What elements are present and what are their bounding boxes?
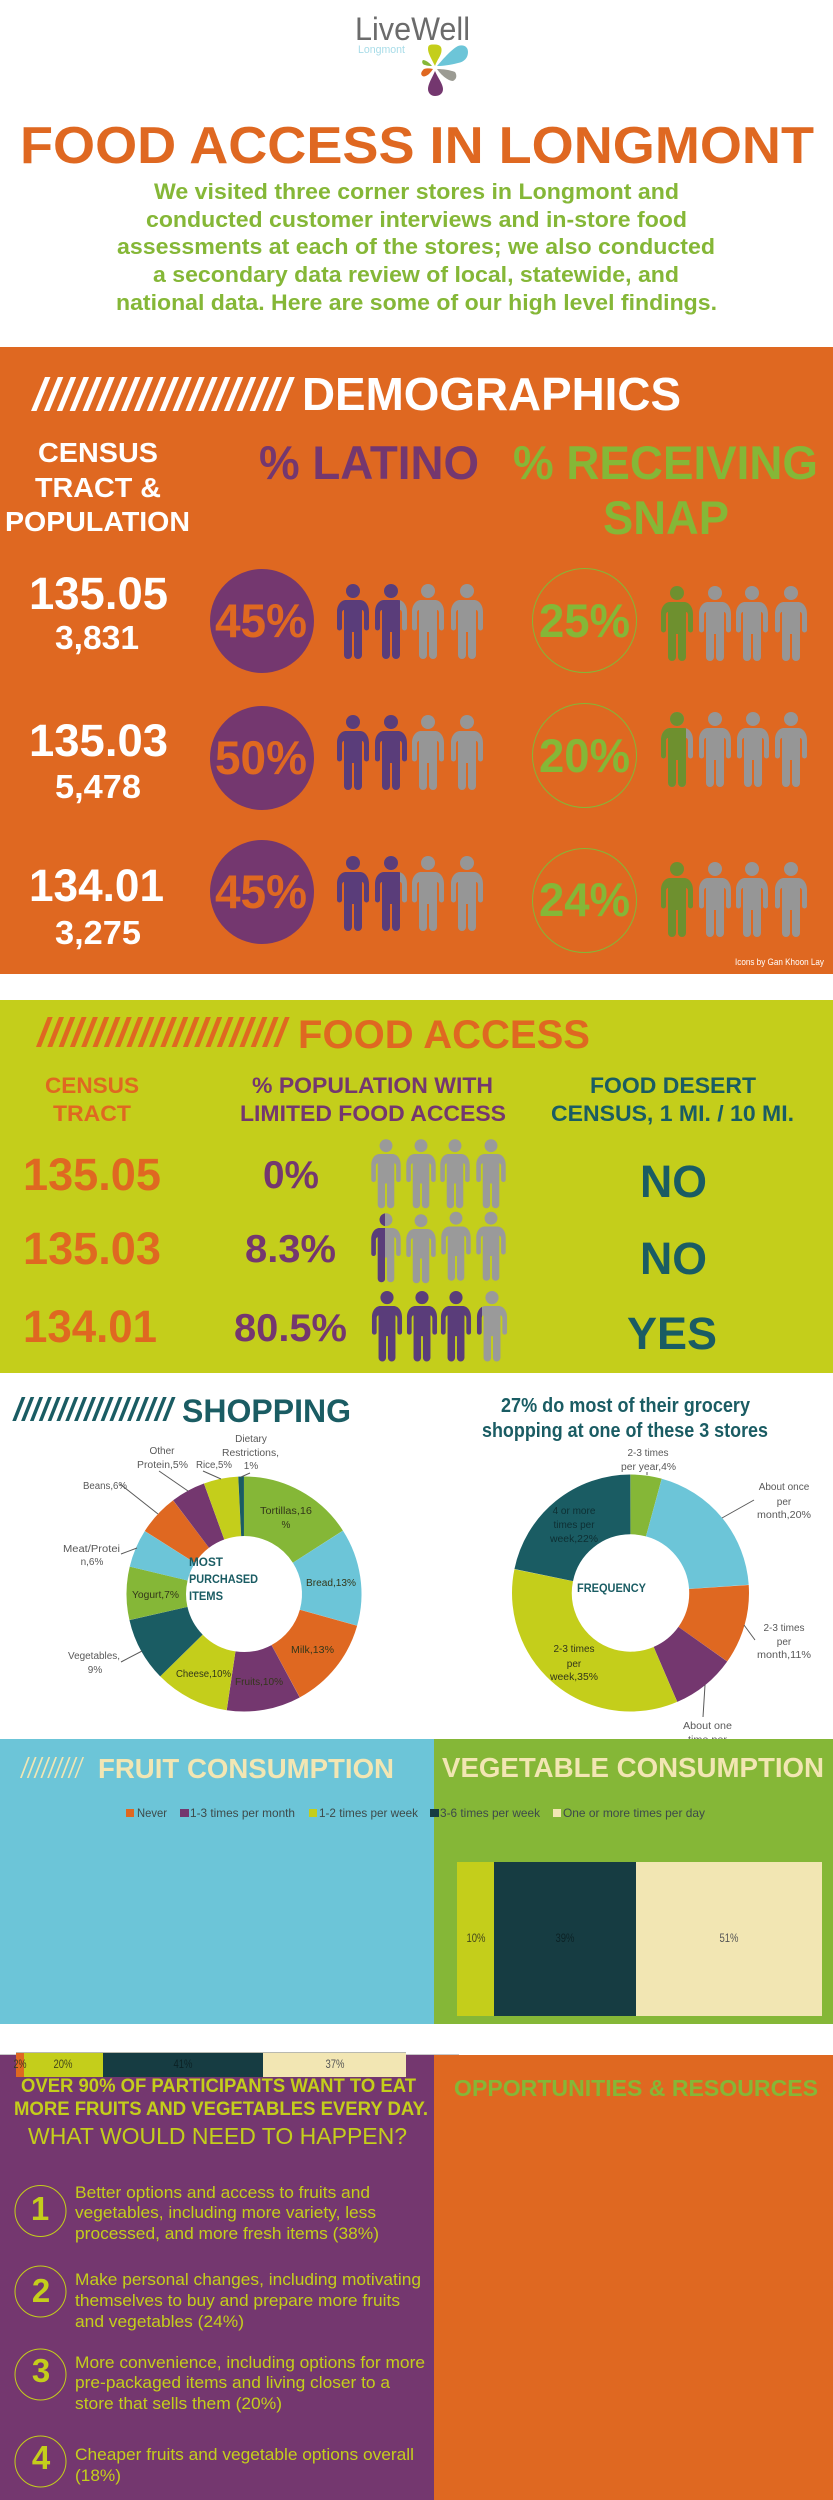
row: 134.01 food access: 134.01 bbox=[23, 1301, 157, 1352]
donut chart: most purchased items: % bbox=[282, 1520, 291, 1531]
subheading: grocery shopping share: shopping at one of these 3 stores bbox=[482, 1420, 768, 1442]
donut chart: shopping frequency: per year,4% bbox=[621, 1462, 676, 1473]
stacked bar: fruit consumption: 2% bbox=[14, 2057, 27, 2071]
legend: consumption frequency bbox=[126, 1806, 705, 1820]
donut chart: shopping frequency: FREQUENCY bbox=[577, 1581, 646, 1595]
item 4: cheaper options: (18%) bbox=[75, 2466, 121, 2485]
donut chart: most purchased items: Meat/Protei bbox=[63, 1544, 120, 1555]
item 2: personal changes: 2 bbox=[32, 2272, 50, 2309]
column heading: food desert: FOOD DESERT bbox=[590, 1073, 757, 1098]
donut chart: shopping frequency: time per bbox=[688, 1735, 728, 1746]
subheading: what would need to happen: WHAT WOULD NEED TO HAPPEN? bbox=[28, 2123, 407, 2149]
intro text: national data. Here are some of our high level findings. bbox=[116, 290, 717, 315]
row: 135.03 food access: 8.3% bbox=[245, 1228, 336, 1271]
intro text: assessments at each of the stores; we also conducted bbox=[117, 234, 715, 259]
donut chart: most purchased items: n,6% bbox=[81, 1557, 104, 1568]
food access slash decoration bbox=[42, 1017, 284, 1047]
item 3: more convenience: store that sells them (20%) bbox=[75, 2394, 282, 2413]
row: 135.03 food access bbox=[23, 1212, 707, 1284]
donut chart: most purchased items: Protein,5% bbox=[137, 1460, 188, 1471]
donut chart: shopping frequency: About once bbox=[759, 1482, 810, 1493]
legend: consumption frequency: 3-6 times per week bbox=[440, 1806, 541, 1820]
donut chart: shopping frequency: 4 or more bbox=[553, 1506, 596, 1517]
subheading: grocery shopping share bbox=[482, 1395, 768, 1442]
row: 134.01 food access: YES bbox=[627, 1308, 717, 1359]
demographics slash decoration bbox=[38, 377, 288, 411]
legend: consumption frequency: Never bbox=[137, 1806, 167, 1820]
donut chart: most purchased items: Cheese,10% bbox=[176, 1669, 231, 1680]
intro text: We visited three corner stores in Longmont and bbox=[154, 179, 679, 204]
item 1: better options: vegetables, including more variety, less bbox=[75, 2203, 376, 2222]
donut chart: most purchased items: Fruits,10% bbox=[235, 1677, 283, 1688]
logo: LiveWell Longmont bbox=[355, 11, 470, 96]
row: tract 135.05: 135.05 bbox=[29, 568, 168, 619]
intro text: a secondary data review of local, statewide, and bbox=[153, 262, 679, 287]
donut chart: most purchased items: Bread,13% bbox=[306, 1578, 356, 1589]
donut chart: most purchased items: MOST bbox=[189, 1555, 224, 1569]
intro text bbox=[116, 179, 717, 315]
row: tract 135.03: 135.03 bbox=[29, 715, 168, 766]
donut chart: shopping frequency: About one bbox=[683, 1721, 732, 1732]
column heading: census tract and population: TRACT & bbox=[35, 472, 161, 503]
row: tract 134.01: 24% bbox=[539, 873, 630, 926]
logo: LiveWell Longmont: LiveWell bbox=[355, 11, 470, 47]
item 3: more convenience bbox=[15, 2349, 425, 2413]
item 3: more convenience: 3 bbox=[32, 2352, 50, 2389]
row: 135.05 food access: NO bbox=[640, 1156, 707, 1207]
fruit slash decoration bbox=[24, 1757, 80, 1778]
heading: over 90 percent: MORE FRUITS AND VEGETABLES EVERY DAY. bbox=[14, 2099, 428, 2120]
row: tract 134.01: 3,275 bbox=[55, 914, 141, 951]
row: tract 135.05: 45% bbox=[215, 594, 307, 647]
row: 135.03 food access: 135.03 bbox=[23, 1223, 161, 1274]
item 2: personal changes: and vegetables (24%) bbox=[75, 2312, 244, 2331]
donut chart: most purchased items: ITEMS bbox=[189, 1589, 223, 1603]
donut chart: most purchased items: Beans,6% bbox=[83, 1481, 127, 1492]
donut chart: most purchased items: PURCHASED bbox=[189, 1572, 258, 1586]
column heading: census tract and population: CENSUS bbox=[38, 437, 158, 468]
donut chart: shopping frequency: per bbox=[567, 1659, 582, 1670]
item 3: more convenience: pre-packaged items and living closer to a bbox=[75, 2373, 391, 2392]
heading: demographics: DEMOGRAPHICS bbox=[302, 368, 681, 420]
item 2: personal changes: themselves to buy and prepare more fruits bbox=[75, 2291, 400, 2310]
row: 135.03 food access: NO bbox=[640, 1233, 707, 1284]
column heading: limited food access: LIMITED FOOD ACCESS bbox=[240, 1101, 506, 1126]
stacked bar: vegetable consumption bbox=[457, 1862, 822, 2016]
panel: shopping bbox=[17, 1393, 811, 1746]
donut chart: most purchased items: 1% bbox=[244, 1461, 258, 1472]
column heading: percent receiving SNAP bbox=[513, 436, 818, 544]
stacked bar: vegetable consumption: 51% bbox=[720, 1931, 739, 1945]
panel: what would need to happen bbox=[0, 2055, 434, 2500]
item 4: cheaper options: 4 bbox=[32, 2439, 51, 2476]
legend: consumption frequency: 1-2 times per week bbox=[319, 1806, 419, 1820]
heading: food access: FOOD ACCESS bbox=[298, 1013, 590, 1057]
stacked bar: fruit consumption: 20% bbox=[54, 2057, 73, 2071]
donut chart: most purchased items: Milk,13% bbox=[291, 1645, 334, 1656]
donut chart: shopping frequency bbox=[507, 1448, 811, 1746]
heading: opportunities and resources: OPPORTUNITIES & RESOURCES bbox=[454, 2075, 818, 2101]
donut chart: most purchased items: Tortillas,16 bbox=[260, 1506, 312, 1517]
donut chart: shopping frequency: week,22% bbox=[549, 1534, 598, 1545]
donut chart: shopping frequency: per bbox=[777, 1497, 792, 1508]
item 4: cheaper options bbox=[15, 2436, 414, 2487]
column heading: food desert bbox=[551, 1073, 794, 1126]
item 3: more convenience: More convenience, including options for more bbox=[75, 2353, 425, 2372]
row: tract 135.03: 20% bbox=[539, 729, 630, 782]
donut chart: shopping frequency: 2-3 times bbox=[553, 1644, 595, 1655]
row: tract 135.03: 50% bbox=[215, 731, 307, 784]
row: tract 135.05: 3,831 bbox=[55, 619, 139, 656]
row: tract 135.03 bbox=[29, 704, 807, 810]
row: 135.05 food access bbox=[23, 1139, 707, 1208]
stacked bar: fruit consumption: 41% bbox=[174, 2057, 193, 2071]
shopping slash decoration bbox=[17, 1397, 171, 1421]
row: tract 134.01 bbox=[29, 840, 807, 952]
row: 134.01 food access bbox=[23, 1291, 717, 1361]
heading: vegetable consumption: VEGETABLE CONSUMPTION bbox=[442, 1752, 824, 1783]
donut chart: shopping frequency: times per bbox=[553, 1520, 595, 1531]
item 1: better options: processed, and more fresh items (38%) bbox=[75, 2224, 379, 2243]
heading: shopping: SHOPPING bbox=[182, 1393, 351, 1429]
donut chart: shopping frequency: month,11% bbox=[757, 1650, 811, 1661]
row: 135.05 food access: 0% bbox=[263, 1154, 319, 1197]
column heading: census tract and population bbox=[5, 437, 190, 537]
donut chart: shopping frequency: week,35% bbox=[549, 1672, 598, 1683]
item 1: better options: Better options and access to fruits and bbox=[75, 2183, 370, 2202]
donut chart: shopping frequency: per bbox=[777, 1637, 792, 1648]
row: tract 135.05 bbox=[29, 568, 807, 673]
donut chart: most purchased items: Dietary bbox=[235, 1434, 267, 1445]
column heading: food desert: CENSUS, 1 MI. / 10 MI. bbox=[551, 1101, 794, 1126]
item 2: personal changes bbox=[15, 2266, 421, 2331]
heading: fruit consumption: FRUIT CONSUMPTION bbox=[98, 1753, 394, 1784]
column heading: census tract and population: POPULATION bbox=[5, 506, 190, 537]
item 4: cheaper options: Cheaper fruits and vegetable options overall bbox=[75, 2445, 414, 2464]
item 1: better options bbox=[15, 2183, 379, 2243]
column heading: percent Latino: % LATINO bbox=[259, 436, 479, 489]
column heading: census tract bbox=[45, 1073, 139, 1126]
donut chart: most purchased items bbox=[63, 1434, 368, 1718]
item 2: personal changes: Make personal changes, including motivating bbox=[75, 2270, 421, 2289]
donut chart: shopping frequency: 2-3 times bbox=[627, 1448, 669, 1459]
donut chart: most purchased items: Restrictions, bbox=[222, 1448, 279, 1459]
row: tract 135.05: 25% bbox=[539, 594, 630, 647]
row: 135.05 food access: 135.05 bbox=[23, 1149, 161, 1200]
donut chart: most purchased items: Yogurt,7% bbox=[132, 1590, 179, 1601]
item 1: better options: 1 bbox=[31, 2190, 49, 2227]
panel: vegetable consumption bbox=[434, 1739, 833, 2024]
heading: over 90 percent: OVER 90% OF PARTICIPANTS WANT TO EAT bbox=[21, 2076, 416, 2097]
legend: consumption frequency: 1-3 times per month bbox=[190, 1806, 295, 1820]
stacked bar: fruit consumption bbox=[0, 2052, 459, 2077]
row: 134.01 food access: 80.5% bbox=[234, 1307, 347, 1350]
intro text: conducted customer interviews and in-store food bbox=[146, 207, 687, 232]
donut chart: most purchased items: Vegetables, bbox=[68, 1651, 120, 1662]
panel: opportunities and resources bbox=[434, 2055, 833, 2500]
donut chart: shopping frequency: 2-3 times bbox=[763, 1623, 805, 1634]
row: tract 134.01: 134.01 bbox=[29, 860, 164, 911]
panel: fruit consumption bbox=[0, 1739, 434, 2024]
column heading: census tract: TRACT bbox=[53, 1101, 132, 1126]
panel: food access bbox=[0, 1000, 833, 1373]
donut chart: most purchased items: 9% bbox=[88, 1665, 102, 1676]
row: tract 134.01: 45% bbox=[215, 865, 307, 918]
donut chart: most purchased items: Other bbox=[149, 1446, 175, 1457]
donut chart: shopping frequency: month,20% bbox=[757, 1510, 811, 1521]
column heading: census tract: CENSUS bbox=[45, 1073, 139, 1098]
column heading: limited food access bbox=[240, 1073, 506, 1126]
stacked bar: fruit consumption: 37% bbox=[326, 2057, 345, 2071]
stacked bar: vegetable consumption: 39% bbox=[556, 1931, 575, 1945]
row: tract 135.03: 5,478 bbox=[55, 768, 141, 805]
column heading: limited food access: % POPULATION WITH bbox=[252, 1073, 493, 1098]
donut chart: most purchased items: Rice,5% bbox=[196, 1460, 232, 1471]
subheading: grocery shopping share: 27% do most of their grocery bbox=[501, 1395, 751, 1417]
title: FOOD ACCESS IN LONGMONT bbox=[20, 117, 814, 175]
column heading: percent receiving SNAP: % RECEIVING bbox=[513, 436, 818, 489]
stacked bar: vegetable consumption: 10% bbox=[466, 1931, 486, 1945]
logo: LiveWell Longmont: Longmont bbox=[358, 44, 405, 56]
panel: demographics bbox=[0, 347, 833, 974]
heading: over 90 percent bbox=[14, 2076, 428, 2120]
legend: consumption frequency: One or more times per day bbox=[563, 1806, 705, 1820]
column heading: percent receiving SNAP: SNAP bbox=[603, 491, 729, 544]
